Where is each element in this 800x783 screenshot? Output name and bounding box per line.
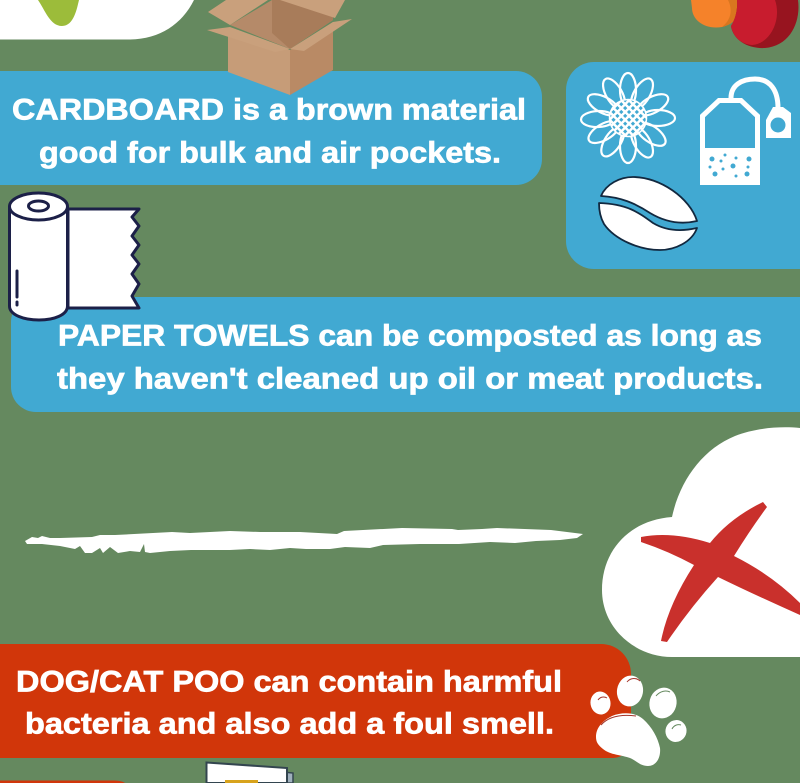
icon: paper towel roll: [10, 193, 139, 320]
text: cardboard: CARDBOARD is a brown material: [12, 94, 526, 127]
text: paper towels: PAPER TOWELS can be composted as long as: [58, 320, 762, 353]
icon: daisy flower: [581, 73, 675, 163]
panel: paper towels: [11, 297, 800, 412]
icon: coffee bean: [599, 177, 697, 250]
text: cardboard: [12, 94, 526, 170]
icon: red X: [641, 502, 800, 642]
icon: green leaf tip: [38, 0, 79, 26]
brush stroke divider: [25, 528, 583, 553]
panel: cardboard: [0, 71, 542, 185]
icon: newspaper fragment: [206, 762, 293, 783]
text: paper towels: [57, 320, 763, 396]
icon: paw print: [589, 673, 690, 766]
icon: apple and orange fragment: [691, 0, 798, 48]
text: paper towels: they haven't cleaned up oil or meat products.: [57, 363, 763, 396]
text: cardboard: good for bulk and air pockets.: [39, 137, 501, 170]
text: dog and cat poo: bacteria and also add a foul smell.: [25, 708, 554, 741]
white cloud fragment at top: [0, 0, 194, 40]
panel: next item fragment: [0, 780, 125, 783]
cloud with red X: [602, 427, 800, 657]
icon: tea bag: [700, 79, 791, 185]
panel: compostable items: [566, 62, 800, 269]
panel: dog and cat poo: [0, 644, 631, 758]
text: dog and cat poo: DOG/CAT POO can contain harmful: [16, 666, 562, 699]
icon: cardboard box: [207, 0, 352, 95]
text: dog and cat poo: [16, 666, 562, 741]
